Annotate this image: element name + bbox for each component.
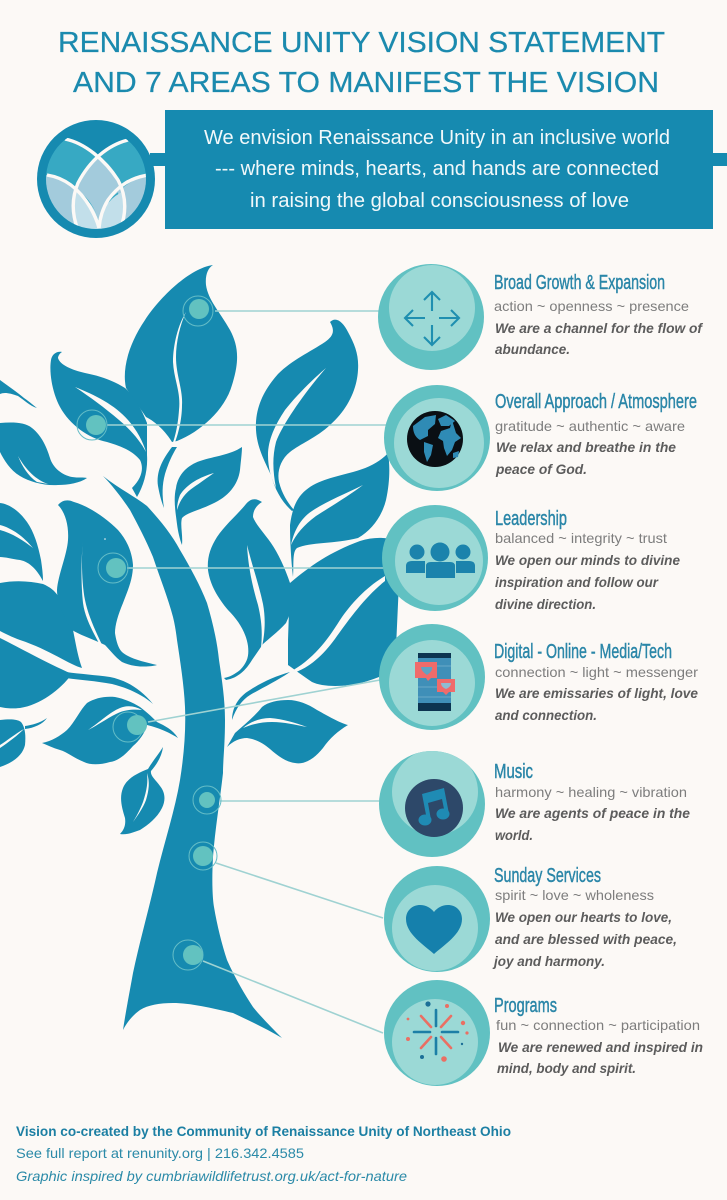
item 7: programs: mind, body and spirit.	[497, 1060, 636, 1076]
item 7: programs	[384, 980, 703, 1086]
item 7: programs: We are renewed and inspired in	[498, 1039, 703, 1055]
item 5: music	[379, 749, 690, 857]
footer credits: Vision co-created by the Community of Renaissance Unity of Northeast Ohio	[16, 1123, 511, 1139]
icon: music note	[379, 749, 485, 857]
item 1: broad growth: We are a channel for the flow of	[495, 320, 703, 336]
leaf: lower far left	[0, 719, 25, 767]
item 2: overall approach: We relax and breathe in the	[496, 439, 676, 455]
item 4: digital: and connection.	[495, 707, 597, 723]
leaf: lower left	[42, 697, 178, 764]
item 5: music: world.	[495, 827, 533, 843]
icon: arrows	[378, 264, 484, 370]
icon: tablet with chat bubbles	[379, 624, 485, 730]
item 1: broad growth	[378, 264, 703, 370]
connector lines	[107, 311, 388, 1033]
icon: globe	[384, 385, 490, 491]
title	[58, 27, 665, 99]
leaf: center small	[175, 447, 242, 545]
item 5: music: harmony ~ healing ~ vibration	[495, 784, 687, 800]
leaf: right large	[288, 538, 400, 686]
curved branch: left	[66, 672, 153, 704]
footer credits: See full report at renunity.org | 216.342.4585	[16, 1145, 304, 1161]
title: RENAISSANCE UNITY VISION STATEMENT	[58, 27, 665, 59]
leaf: right of trunk	[227, 700, 348, 763]
footer credits	[16, 1123, 511, 1184]
branch sliver	[232, 672, 290, 720]
item 6: sunday services	[384, 865, 677, 972]
leaf: left large	[0, 581, 82, 668]
leaf: lower center-left	[57, 500, 157, 667]
leaf: left mid	[0, 503, 43, 581]
item 4: digital: connection ~ light ~ messenger	[495, 664, 698, 680]
item 2: overall approach: gratitude ~ authentic ~ aware	[495, 418, 685, 434]
footer credits: Graphic inspired by cumbriawildlifetrust.org.uk/act-for-nature	[16, 1168, 407, 1184]
marker dots	[77, 296, 221, 970]
item 6: sunday services: joy and harmony.	[492, 953, 605, 969]
item 6: sunday services: and are blessed with peace,	[495, 931, 677, 947]
item 6: sunday services: We open our hearts to love,	[495, 909, 672, 925]
icon: fireworks	[384, 980, 490, 1086]
item 5: music: We are agents of peace in the	[495, 805, 690, 821]
item 1: broad growth: action ~ openness ~ presence	[494, 298, 689, 314]
item 6: sunday services: Sunday Services	[494, 865, 601, 887]
title: AND 7 AREAS TO MANIFEST THE VISION	[73, 67, 659, 99]
item 3: leadership: We open our minds to divine	[495, 552, 680, 568]
item 7: programs: Programs	[494, 995, 557, 1017]
item 4: digital: We are emissaries of light, love	[495, 685, 698, 701]
icon: people	[382, 505, 488, 611]
vision banner: in raising the global consciousness of love	[250, 190, 629, 212]
leaf: small hanging	[120, 747, 164, 834]
item 2: overall approach	[384, 385, 697, 491]
item 7: programs: fun ~ connection ~ participation	[496, 1017, 700, 1033]
item 3: leadership: Leadership	[495, 508, 567, 530]
leaf: center right	[208, 499, 296, 680]
leaf: top center	[125, 265, 237, 442]
item 3: leadership: divine direction.	[495, 596, 596, 612]
vision banner	[150, 110, 727, 229]
vision banner: We envision Renaissance Unity in an inclusive world	[204, 127, 670, 149]
leaf: left top curl	[0, 380, 37, 408]
tree illustration	[0, 265, 400, 1038]
item 4: digital	[379, 624, 698, 730]
leaf: far left	[0, 423, 87, 485]
item 1: broad growth: abundance.	[495, 341, 570, 357]
leaf: right middle	[290, 453, 389, 577]
leaf: center stem	[158, 447, 177, 508]
icon: heart	[384, 866, 490, 972]
item 3: leadership: inspiration and follow our	[495, 574, 659, 590]
leaf: upper left	[50, 352, 147, 497]
item 2: overall approach: peace of God.	[495, 461, 587, 477]
item 3: leadership	[382, 505, 680, 612]
logo	[37, 120, 155, 238]
trunk	[103, 476, 282, 1038]
item 5: music: Music	[494, 761, 533, 783]
leaf: right upper	[256, 320, 358, 511]
vision banner: --- where minds, hearts, and hands are connected	[215, 158, 659, 180]
item 6: sunday services: spirit ~ love ~ wholeness	[495, 887, 654, 903]
item 3: leadership: balanced ~ integrity ~ trust	[495, 530, 667, 546]
